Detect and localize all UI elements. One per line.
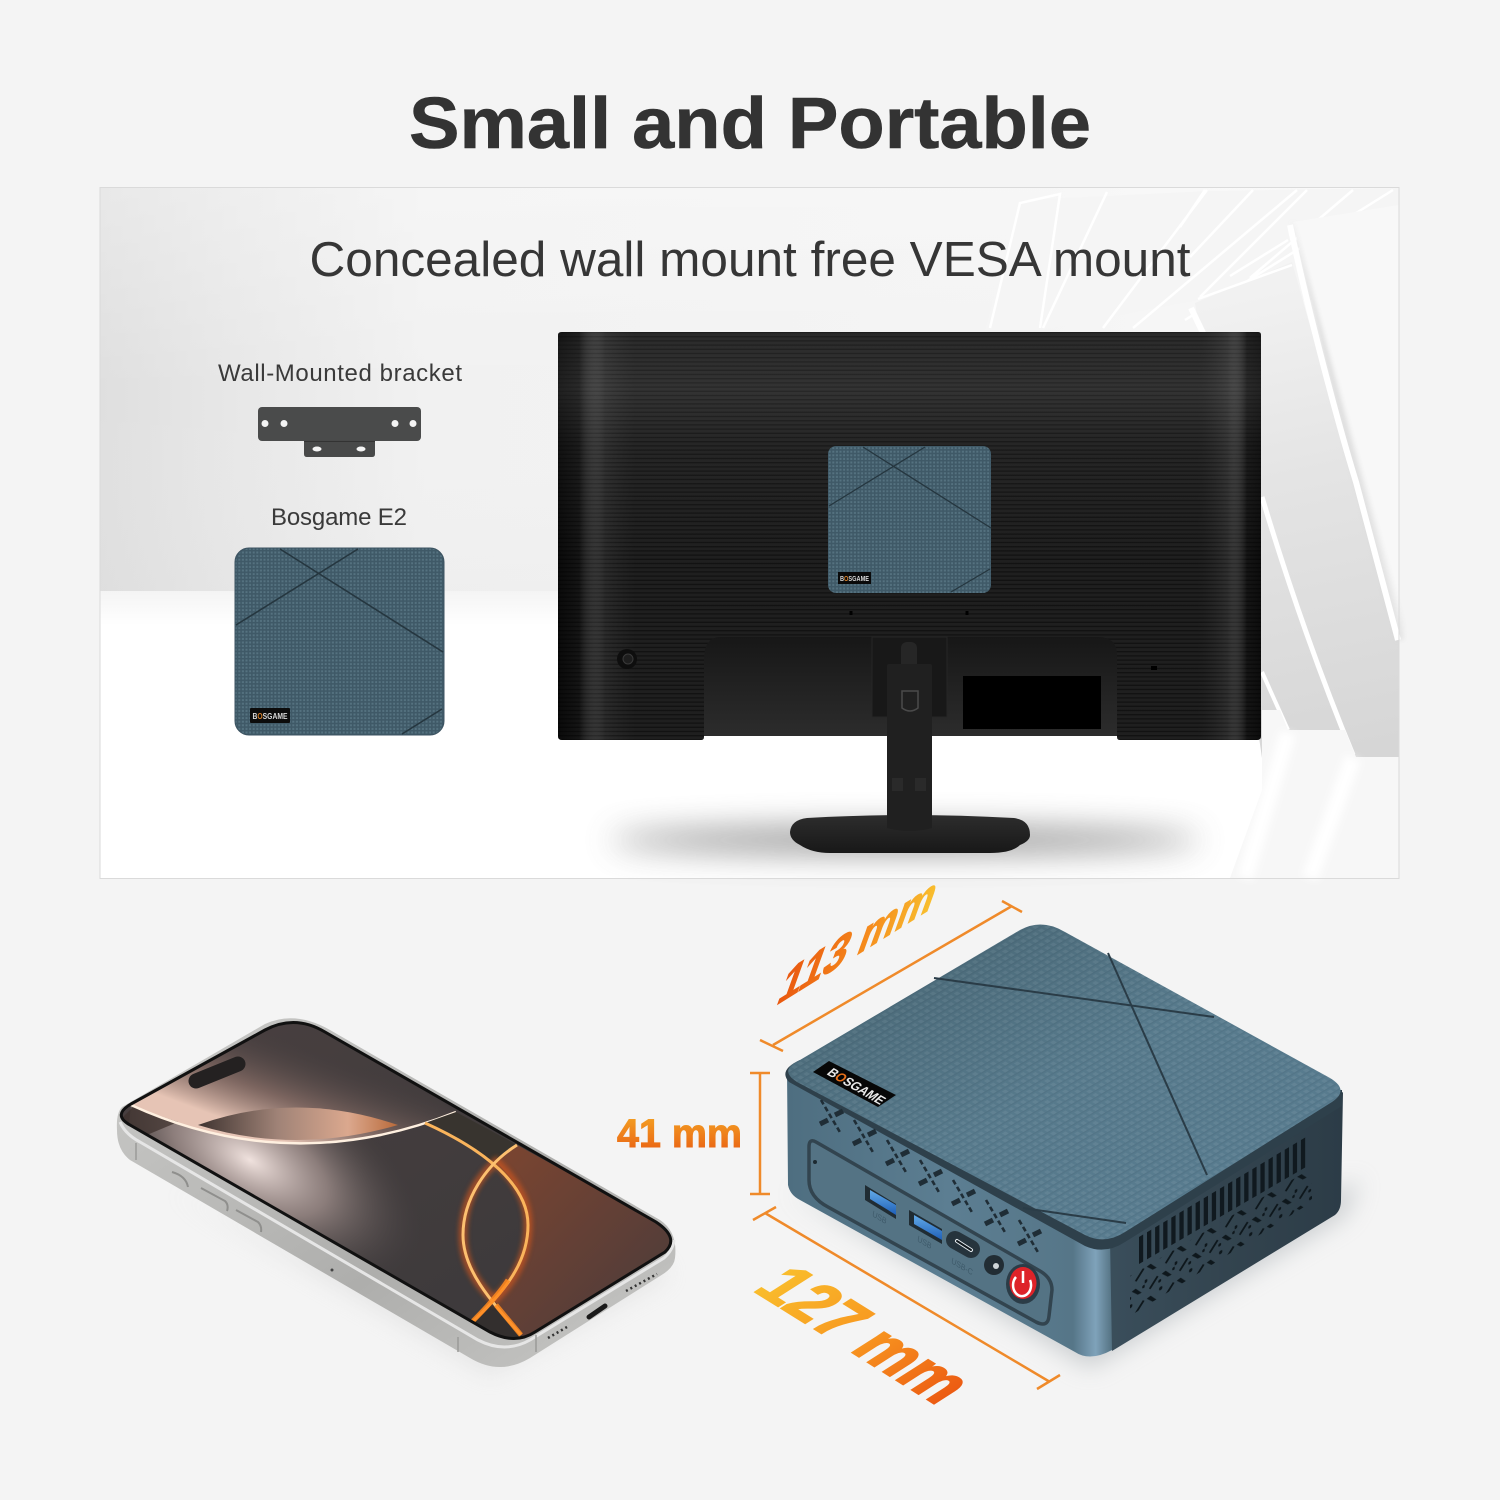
lens shape — [198, 1108, 398, 1140]
logo label: BOSGAME — [823, 1066, 888, 1107]
panel: wall mount scene — [100, 187, 1404, 878]
usb port 1: USB — [872, 1209, 887, 1226]
top chamfer edge — [785, 1060, 1342, 1250]
power button — [1006, 1264, 1040, 1304]
right face — [1110, 1092, 1343, 1351]
stand shadow — [610, 827, 1200, 853]
dimension 113 mm — [760, 863, 1022, 1051]
light glow — [130, 1106, 393, 1258]
mini pc — [785, 924, 1360, 1368]
phone shadow — [170, 1190, 670, 1375]
usb-c port — [951, 1240, 974, 1278]
panel border — [100, 188, 1399, 878]
device logo — [838, 572, 871, 584]
dimension text: 127 mm — [739, 1255, 992, 1414]
port knob — [617, 649, 637, 669]
mini pc floor shadow — [790, 1180, 1360, 1368]
title: Small and Portable — [409, 84, 1091, 164]
screw dots — [851, 611, 967, 615]
top face — [788, 924, 1341, 1239]
dimension text: 113 mm — [771, 863, 947, 1018]
lower recess — [704, 637, 1117, 736]
phone body — [117, 1018, 675, 1367]
dimension line — [753, 1207, 1060, 1389]
dimension 41 mm — [617, 1073, 770, 1194]
dark top-right patch — [425, 1112, 517, 1162]
audio jack — [984, 1255, 1004, 1275]
arc line — [131, 1105, 456, 1143]
dimension line — [750, 1073, 770, 1194]
monitor — [558, 332, 1261, 853]
logo label — [813, 1061, 896, 1107]
screen — [122, 1024, 670, 1337]
logo label — [250, 708, 290, 723]
black label patch — [963, 676, 1101, 729]
dimension 127 mm — [739, 1207, 1060, 1414]
lens inner glow — [463, 1162, 528, 1300]
logo label: BOSGAME — [252, 711, 288, 721]
camera pill — [196, 1064, 238, 1081]
top face lines — [934, 953, 1214, 1223]
dimension text: 41 mm — [617, 1112, 742, 1156]
phone bezel edge highlight — [120, 1122, 674, 1347]
stand emblem — [902, 691, 918, 711]
hinge tab — [901, 642, 917, 670]
orange arc glow — [464, 1280, 521, 1335]
neck hinge — [872, 637, 947, 717]
right side slots — [1139, 1137, 1306, 1264]
heading: concealed wall mount: Concealed wall mount free VESA mount — [310, 233, 1191, 287]
panel backdrop — [100, 187, 1404, 878]
icon: bracket — [258, 407, 421, 457]
front vents — [820, 1100, 1041, 1254]
side antenna seams — [136, 1143, 536, 1352]
label: bosgame e2: Bosgame E2 — [271, 504, 407, 531]
monitor back shell — [558, 332, 1261, 740]
lock slot — [1151, 666, 1157, 670]
usb port 2: USB — [917, 1234, 932, 1251]
bottom dark patch — [476, 1302, 518, 1337]
side buttons — [172, 1172, 261, 1232]
io panel — [809, 1141, 1052, 1324]
usb-c port: USB-C — [951, 1256, 974, 1278]
upper band — [133, 1046, 438, 1142]
device on monitor — [828, 446, 991, 593]
usb port 2 — [909, 1210, 942, 1251]
dimension line — [760, 901, 1022, 1051]
device: bosgame e2 top view — [235, 548, 444, 735]
phone — [116, 1018, 676, 1368]
brown right region — [495, 1145, 670, 1336]
right side hole grid — [1130, 1168, 1312, 1316]
orange arcs — [425, 1123, 528, 1330]
bottom ports and speakers — [330, 1268, 657, 1338]
stand base — [790, 815, 1030, 853]
top face texture — [788, 924, 1341, 1239]
front face — [787, 1060, 1112, 1357]
screen outline — [121, 1022, 671, 1338]
device logo: BOSGAME — [840, 576, 869, 583]
usb port 1 — [865, 1185, 896, 1226]
status led — [813, 1160, 817, 1164]
label: wall-mounted bracket: Wall-Mounted bracket — [218, 360, 462, 387]
stand neck — [887, 664, 932, 831]
left wedge — [124, 1107, 178, 1134]
